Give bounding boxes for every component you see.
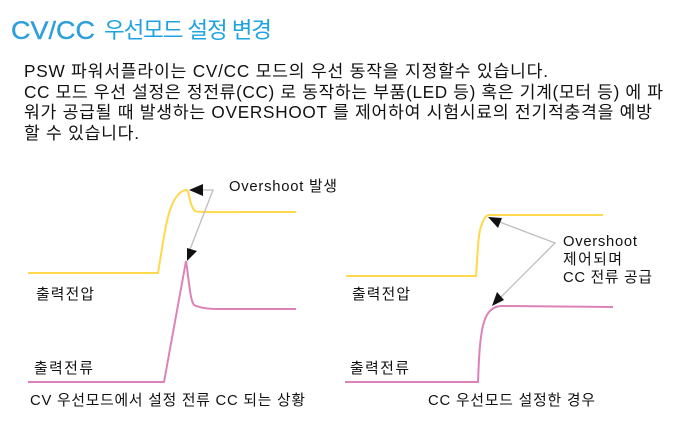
label: output current: 출력전류 (350, 360, 409, 377)
label: overshoot controlled (563, 234, 652, 286)
current curve without overshoot (345, 306, 613, 382)
voltage curve with overshoot (28, 190, 296, 273)
text block: description: 워가 공급될 때 발생하는 OVERSHOOT 를 제어하여 시험시료의 전기적충격을 예방 (24, 102, 652, 122)
text block: description: CC 모드 우선 설정은 정전류(CC) 로 동작하는 부품(LED 등) 혹은 기계(모터 등) 에 파 (24, 82, 663, 102)
chart: CC mode controlled (345, 215, 652, 409)
title (11, 17, 272, 45)
label: output voltage: 출력전압 (352, 286, 410, 303)
text block: description: 할 수 있습니다. (24, 123, 139, 143)
label: output current: 출력전류 (34, 360, 93, 377)
caption: CC mode: CC 우선모드 설정한 경우 (428, 392, 595, 409)
text block: description (24, 61, 663, 143)
label: overshoot controlled: 제어되며 (563, 251, 622, 268)
caption: CV mode: CV 우선모드에서 설정 전류 CC 되는 상황 (30, 392, 305, 409)
chart: CV mode overshoot (28, 178, 337, 409)
voltage curve without overshoot (346, 215, 603, 276)
title: 우선모드 설정 변경 (104, 18, 272, 43)
arrows: overshoot controlled (488, 217, 555, 306)
label: overshoot controlled: Overshoot (563, 234, 637, 250)
arrows: overshoot (187, 184, 213, 261)
label: output voltage: 출력전압 (36, 286, 94, 303)
label: overshoot occurrence: Overshoot 발생 (229, 178, 337, 195)
title: CV/CC (11, 17, 95, 45)
text block: description: PSW 파워서플라이는 CV/CC 모드의 우선 동작을 지정할수 있습니다. (24, 61, 548, 81)
current curve with overshoot (28, 261, 296, 382)
label: overshoot controlled: CC 전류 공급 (563, 269, 652, 286)
